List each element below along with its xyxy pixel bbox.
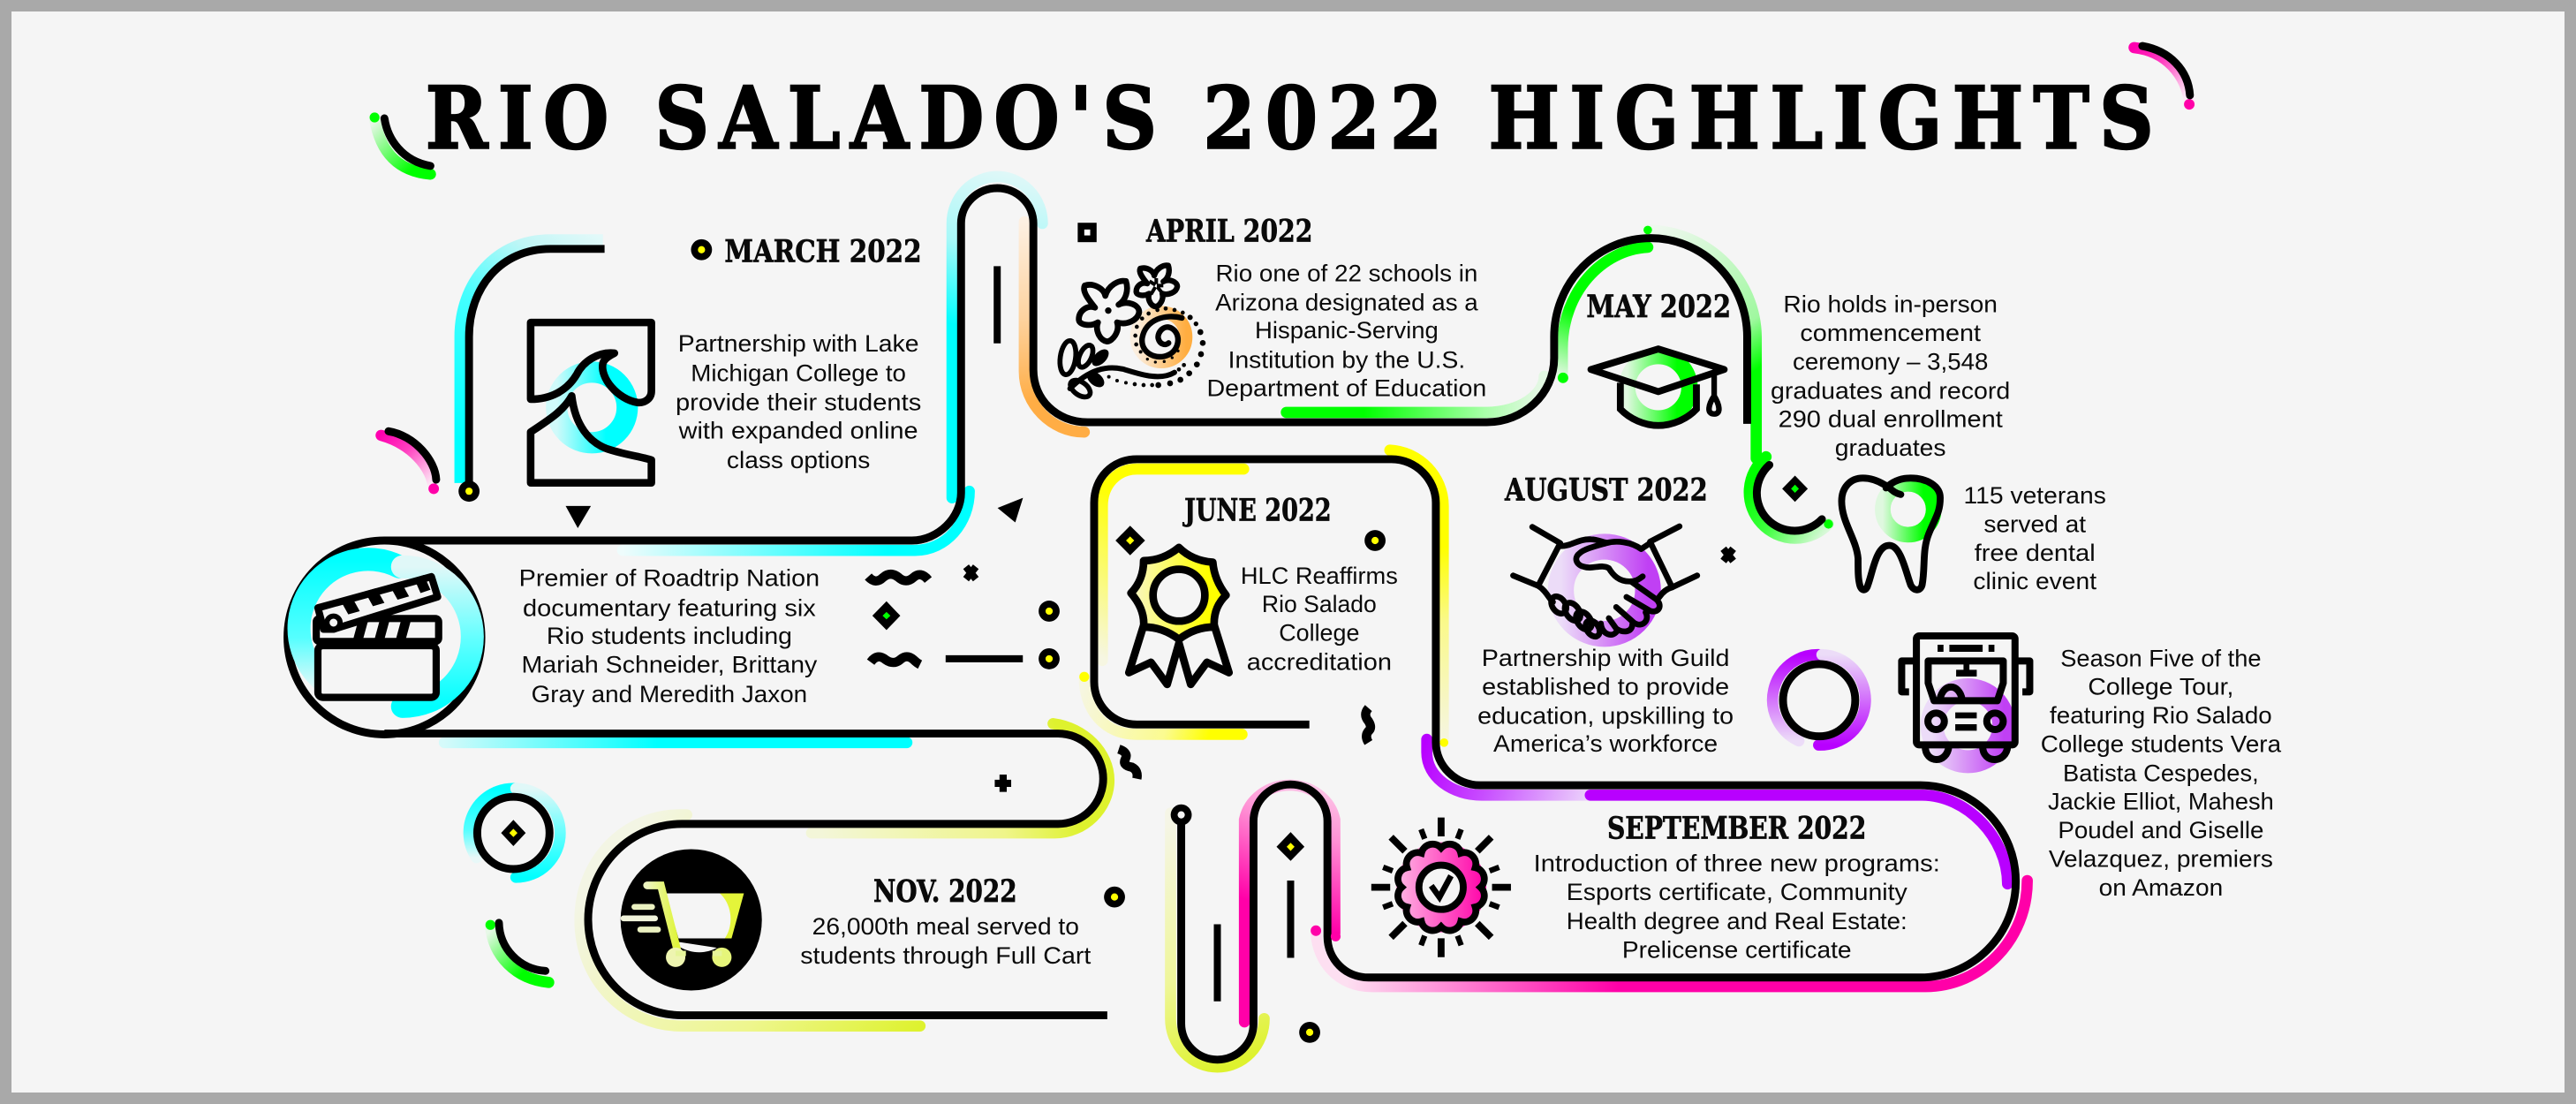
August panel bbox=[1477, 473, 1734, 757]
green accent arc bbox=[486, 920, 548, 982]
accent: March cyan bbox=[460, 240, 603, 483]
documentary panel bbox=[288, 541, 820, 734]
June description: Rio Salado bbox=[1262, 591, 1377, 617]
icon: certificate seal bbox=[1371, 818, 1511, 957]
accent: May green outer bbox=[1648, 230, 1756, 458]
accent: lime S-curve bbox=[812, 723, 1109, 833]
small tips bbox=[1079, 226, 1652, 941]
College Tour description bbox=[2041, 645, 2281, 901]
accent: lime Nov curve bbox=[580, 815, 920, 1026]
diamonds bbox=[873, 526, 1304, 861]
timeline path: documentary to November bbox=[384, 734, 1107, 1016]
accent: purple left bbox=[1427, 739, 1606, 795]
icon: bus bbox=[1901, 636, 2029, 761]
timeline path: June to September bbox=[1094, 459, 2016, 1060]
accent: June yellow right bbox=[1390, 450, 1443, 739]
June description bbox=[1241, 563, 1398, 675]
September description: Introduction of three new programs: bbox=[1534, 850, 1940, 876]
magenta accent arc bbox=[381, 431, 439, 494]
plus bbox=[994, 775, 1011, 792]
accent: April orange bbox=[1024, 222, 1084, 432]
May description: Rio holds in-person bbox=[1783, 291, 1998, 317]
June description: College bbox=[1279, 619, 1359, 646]
documentary description: Gray and Meredith Jaxon bbox=[532, 681, 807, 707]
August description: established to provide bbox=[1482, 674, 1729, 700]
title accent arc: magenta bbox=[2134, 46, 2195, 110]
November description: 26,000th meal served to bbox=[812, 913, 1079, 940]
August description: education, upskilling to bbox=[1477, 702, 1734, 729]
accent: arch cyan bbox=[952, 177, 1042, 498]
College Tour description: featuring Rio Salado bbox=[2050, 702, 2272, 729]
August description: Partnership with Guild bbox=[1482, 645, 1729, 671]
College Tour description: Season Five of the bbox=[2060, 645, 2262, 671]
September description: Health degree and Real Estate: bbox=[1567, 908, 1907, 934]
icon: tooth bbox=[1841, 478, 1940, 590]
November heading: NOV. 2022 bbox=[873, 874, 1017, 910]
documentary description bbox=[519, 565, 820, 707]
March description: Michigan College to bbox=[691, 360, 906, 387]
March description: provide their students bbox=[676, 389, 921, 415]
August description: America’s workforce bbox=[1493, 730, 1718, 757]
College Tour description: College Tour, bbox=[2088, 674, 2233, 700]
September description: Prelicense certificate bbox=[1622, 936, 1852, 963]
March description: Partnership with Lake bbox=[678, 330, 918, 357]
documentary description: Rio students including bbox=[547, 623, 792, 649]
title: RIO SALADO'S 2022 HIGHLIGHTS bbox=[426, 67, 2164, 168]
icon: shopping cart bbox=[621, 849, 762, 990]
title accent arc: green bbox=[370, 112, 430, 174]
timeline path: March start bbox=[469, 249, 605, 489]
September heading: SEPTEMBER 2022 bbox=[1607, 812, 1866, 847]
accent: cyan under documentary bbox=[444, 739, 907, 745]
June description: HLC Reaffirms bbox=[1241, 563, 1398, 589]
March description: with expanded online bbox=[678, 418, 918, 444]
green hook arc with diamond bbox=[1749, 457, 1833, 538]
College Tour description: Jackie Elliot, Mahesh bbox=[2048, 789, 2274, 815]
College Tour description: on Amazon bbox=[2099, 874, 2223, 901]
icon: award rosette bbox=[1129, 548, 1229, 684]
November description bbox=[800, 913, 1092, 969]
icon: handshake bbox=[1513, 526, 1697, 639]
path start dot bbox=[458, 480, 480, 502]
College Tour panel bbox=[1772, 636, 2281, 901]
April heading: APRIL 2022 bbox=[1145, 214, 1312, 249]
accent: magenta arch bbox=[1244, 785, 1335, 1022]
crosses bbox=[966, 548, 1734, 579]
April description: Institution by the U.S. bbox=[1228, 347, 1465, 374]
November panel bbox=[621, 849, 1092, 990]
September description: Esports certificate, Community bbox=[1567, 879, 1908, 905]
March description bbox=[676, 330, 921, 473]
marker dots bbox=[1039, 530, 1386, 1043]
May heading: MAY 2022 bbox=[1586, 290, 1731, 325]
College Tour description: Poudel and Giselle bbox=[2058, 817, 2263, 843]
April marker square bbox=[1077, 223, 1097, 242]
April description bbox=[1207, 260, 1486, 401]
May description: commencement bbox=[1800, 320, 1982, 346]
May description: graduates bbox=[1835, 435, 1946, 461]
dental panel bbox=[1749, 457, 2106, 594]
College Tour description: Velazquez, premiers bbox=[2049, 846, 2273, 873]
May description: ceremony – 3,548 bbox=[1793, 348, 1988, 374]
accent: cyan bend bbox=[623, 491, 970, 550]
May description: 290 dual enrollment bbox=[1779, 405, 2003, 432]
March marker dot bbox=[691, 239, 712, 261]
documentary description: Premier of Roadtrip Nation bbox=[519, 565, 820, 592]
accent: purple right bbox=[1590, 795, 2007, 884]
bars bbox=[946, 266, 1290, 1002]
accent: lime U bbox=[1170, 813, 1265, 1067]
icon: flowers and spiral bbox=[1058, 265, 1205, 400]
documentary description: Mariah Schneider, Brittany bbox=[521, 652, 818, 678]
icon: film clapper bbox=[288, 541, 481, 734]
June heading: JUNE 2022 bbox=[1182, 494, 1332, 529]
March description: class options bbox=[727, 447, 870, 473]
June description: accreditation bbox=[1247, 648, 1392, 675]
April description: Department of Education bbox=[1207, 374, 1486, 401]
May description: graduates and record bbox=[1771, 378, 2010, 405]
accent: April green bbox=[1287, 376, 1545, 412]
arrow: triangle down bbox=[566, 506, 591, 528]
documentary description: documentary featuring six bbox=[523, 595, 816, 622]
dental description: served at bbox=[1983, 511, 2087, 538]
arrow: triangle left bbox=[998, 498, 1023, 523]
May description bbox=[1771, 291, 2010, 461]
November description: students through Full Cart bbox=[800, 942, 1092, 969]
April description: Arizona designated as a bbox=[1215, 290, 1478, 316]
colored accent strokes along the timeline bbox=[444, 177, 2028, 1067]
small decorations bbox=[868, 226, 1734, 1043]
April description: Hispanic-Serving bbox=[1255, 317, 1439, 344]
squiggles bbox=[868, 574, 1371, 779]
accent: May green inner bbox=[1562, 247, 1648, 376]
March heading: MARCH 2022 bbox=[724, 235, 922, 270]
June panel bbox=[1129, 494, 1398, 684]
College Tour description: College students Vera bbox=[2041, 731, 2281, 758]
April description: Rio one of 22 schools in bbox=[1215, 260, 1477, 286]
icon: graduation cap bbox=[1591, 349, 1724, 426]
cyan ring with diamond bbox=[469, 789, 560, 877]
September description bbox=[1534, 850, 1940, 963]
purple ring bbox=[1772, 654, 1865, 745]
April panel bbox=[1058, 214, 1486, 401]
September panel bbox=[1371, 812, 1940, 963]
icon: wave bbox=[531, 322, 652, 483]
dental description: free dental bbox=[1975, 540, 2096, 566]
accent: magenta bottom bbox=[1316, 881, 2028, 987]
accent: June yellow top bbox=[1102, 469, 1243, 661]
timeline path: documentary to May bbox=[384, 188, 1747, 541]
accent: June yellow bottom bbox=[1084, 677, 1242, 734]
dental description: 115 veterans bbox=[1964, 482, 2106, 509]
August description bbox=[1477, 645, 1734, 757]
dental description bbox=[1964, 482, 2106, 594]
College Tour description: Batista Cespedes, bbox=[2063, 760, 2259, 786]
dental description: clinic event bbox=[1973, 568, 2097, 594]
May panel bbox=[1586, 290, 2010, 461]
August heading: AUGUST 2022 bbox=[1504, 473, 1708, 509]
March panel bbox=[531, 235, 922, 483]
